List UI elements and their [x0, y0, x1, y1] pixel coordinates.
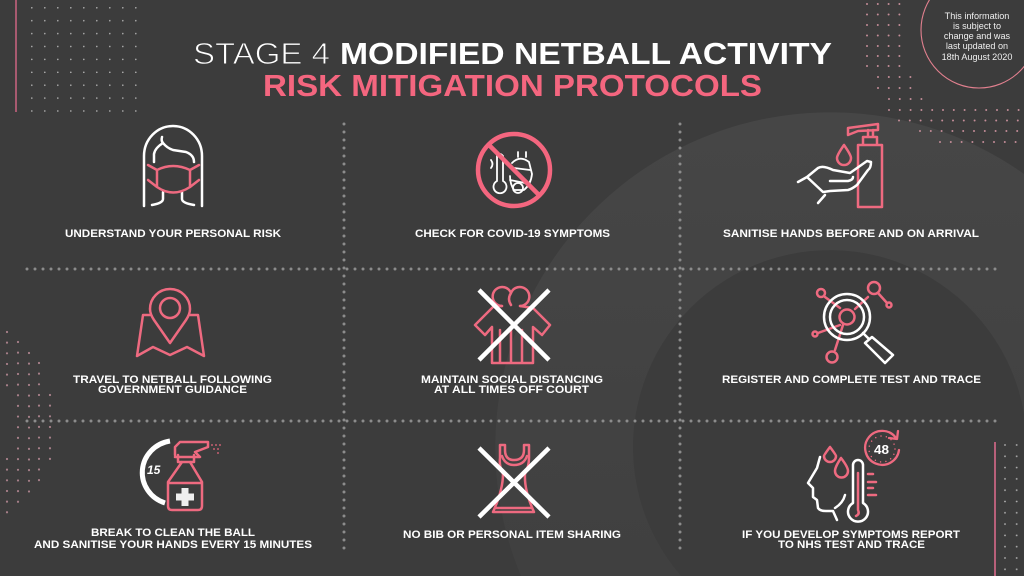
- label: BREAK TO CLEAN THE BALL: [91, 527, 255, 539]
- dot pattern bottom left: [7, 332, 50, 513]
- notice circle: 18th August 2020: [942, 52, 1012, 62]
- label: NO BIB OR PERSONAL ITEM SHARING: [403, 529, 621, 541]
- background ring: [495, 112, 1024, 576]
- icon: social distancing crossed out: [475, 287, 550, 363]
- title: MODIFIED NETBALL ACTIVITY: [340, 36, 832, 71]
- label: AND SANITISE YOUR HANDS EVERY 15 MINUTES: [34, 539, 312, 551]
- dot grid bottom right: [1004, 444, 1024, 576]
- timer number: 15: [147, 463, 161, 477]
- notice circle: last updated on: [946, 41, 1008, 51]
- notice circle: change and was: [944, 31, 1011, 41]
- label: UNDERSTAND YOUR PERSONAL RISK: [65, 228, 281, 240]
- dot pattern top right: [867, 4, 1020, 142]
- accent line top left: [15, 0, 17, 112]
- icon: face mask: [144, 126, 202, 206]
- timer number: 48: [874, 442, 889, 457]
- label: MAINTAIN SOCIAL DISTANCING: [421, 374, 603, 386]
- label: IF YOU DEVELOP SYMPTOMS REPORT: [742, 529, 960, 541]
- label: [421, 374, 603, 396]
- icon: map pin: [137, 289, 204, 356]
- title: [193, 36, 832, 103]
- title: STAGE 4: [193, 36, 330, 71]
- icon: spray bottle with timer: [142, 441, 221, 510]
- label: [34, 527, 312, 551]
- label: GOVERNMENT GUIDANCE: [98, 384, 247, 396]
- dot grid top left: [31, 7, 137, 112]
- icon: test and trace magnifier: [812, 282, 893, 363]
- icon: symptoms 48 hours: [808, 431, 899, 522]
- title: RISK MITIGATION PROTOCOLS: [263, 68, 762, 103]
- notice circle: [921, 0, 1024, 88]
- dotted dividers: [27, 124, 996, 552]
- notice circle: is subject to: [953, 21, 1001, 31]
- label: SANITISE HANDS BEFORE AND ON ARRIVAL: [723, 228, 979, 240]
- label: [742, 529, 960, 551]
- icon: sanitise hands: [798, 124, 882, 207]
- icon: vest crossed out: [479, 445, 549, 517]
- label: AT ALL TIMES OFF COURT: [434, 384, 589, 396]
- icon: no symptoms: [478, 134, 550, 206]
- label: CHECK FOR COVID-19 SYMPTOMS: [415, 228, 610, 240]
- accent line bottom right: [994, 442, 996, 576]
- notice circle: This information: [945, 11, 1009, 21]
- label: TO NHS TEST AND TRACE: [778, 539, 925, 551]
- label: [73, 374, 272, 396]
- label: TRAVEL TO NETBALL FOLLOWING: [73, 374, 272, 386]
- label: REGISTER AND COMPLETE TEST AND TRACE: [722, 374, 981, 386]
